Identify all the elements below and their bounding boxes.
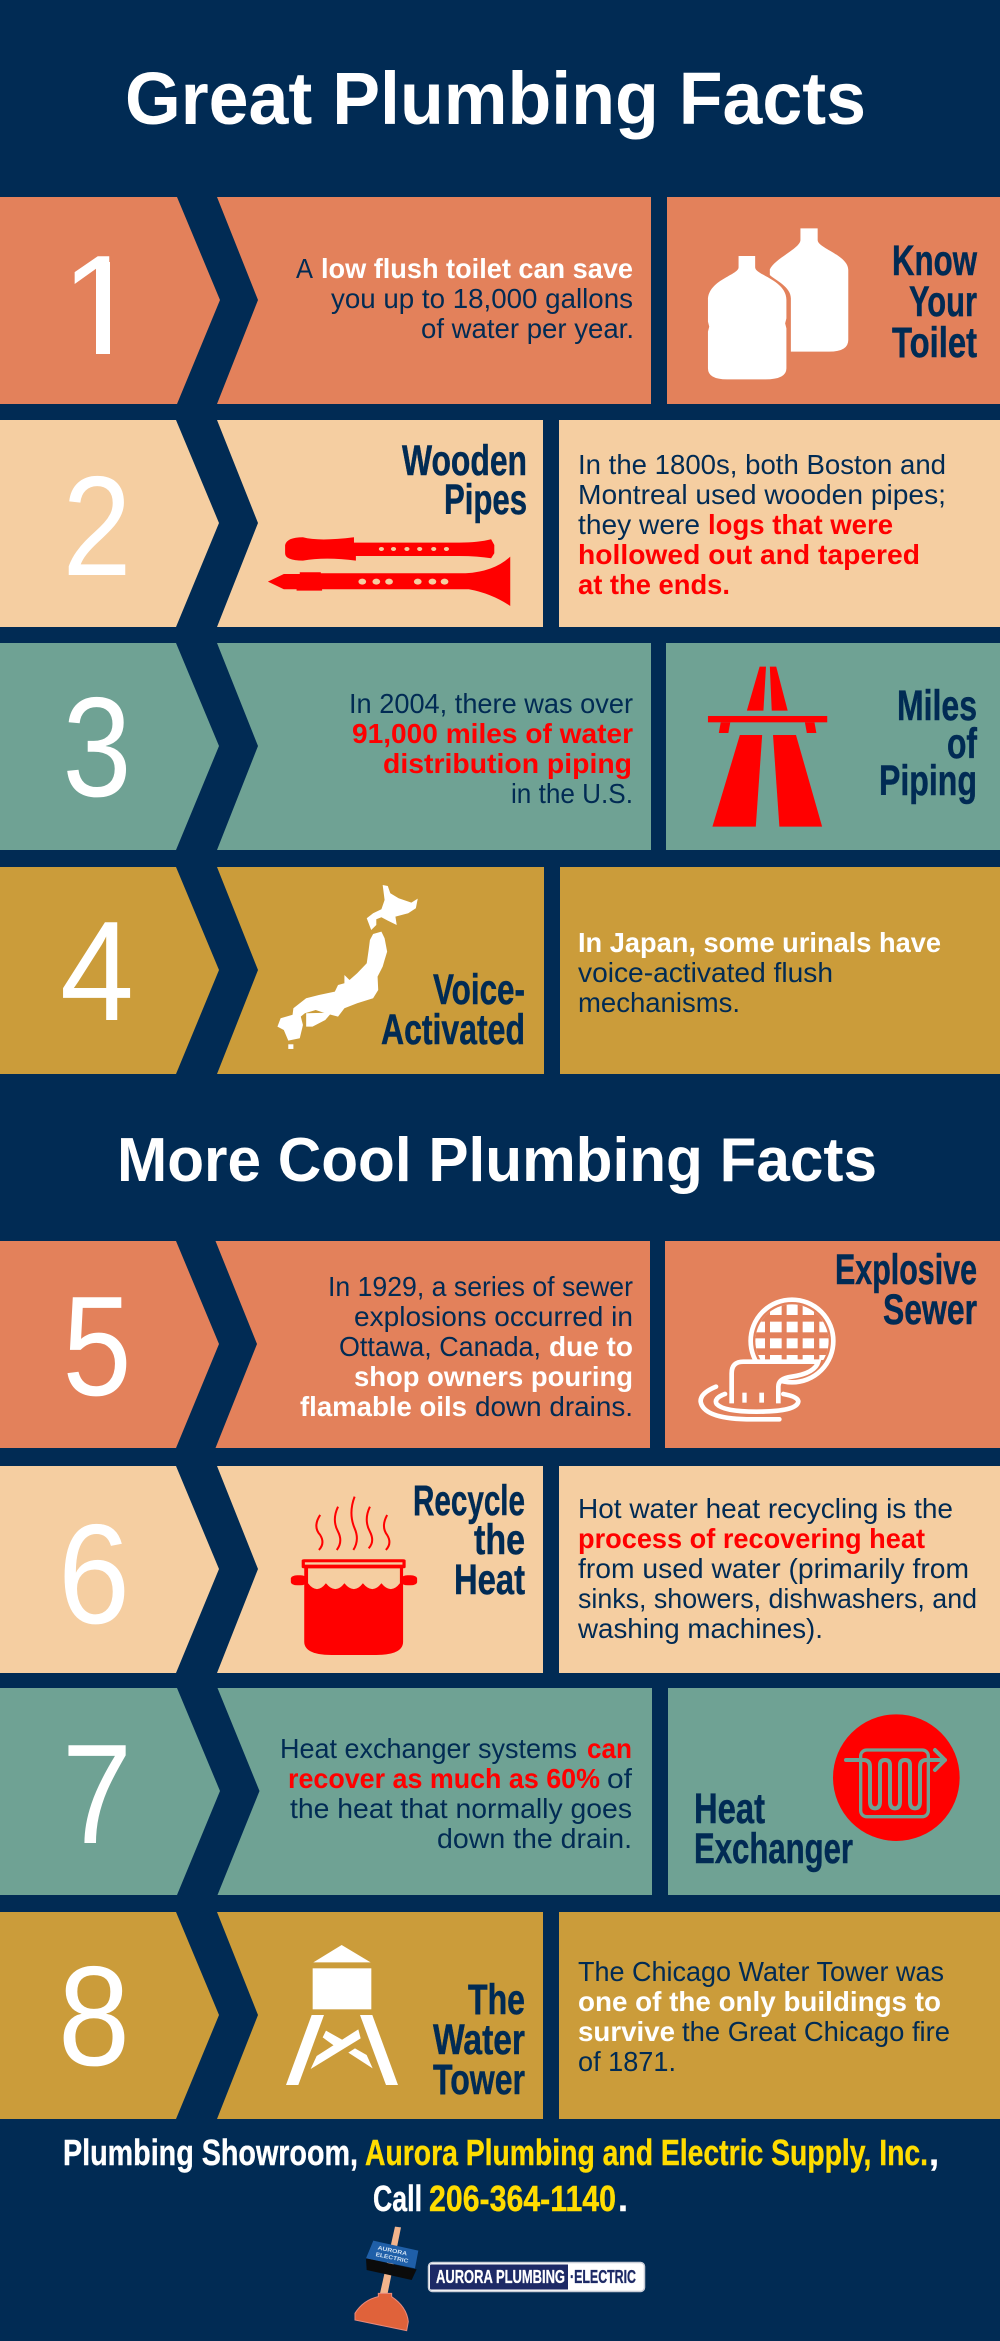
logo: aurora plumbing electric <box>428 2262 644 2292</box>
panel: know your toilet <box>667 197 1000 404</box>
fact 1 text block <box>217 197 651 404</box>
number chevron 5 <box>0 1241 219 1448</box>
fact 4 text block: mechanisms. <box>578 987 740 1018</box>
logo: aurora plumbing electric: ·ELECTRIC <box>570 2267 636 2287</box>
fact 7 text block <box>218 1688 652 1895</box>
fact 6 text block: washing machines). <box>577 1613 823 1644</box>
fact 2 text block: they were <box>578 509 700 540</box>
fact 5 text block <box>216 1241 650 1448</box>
fact 1 text block: of water per year. <box>421 313 634 344</box>
number chevron 6 <box>0 1466 219 1673</box>
icon: wooden pipes <box>268 537 510 606</box>
panel: fact 1 <box>0 197 1000 404</box>
number chevron 5: 5 <box>62 1267 132 1426</box>
number chevron 6: 6 <box>58 1495 130 1654</box>
heading: recycle the heat: Heat <box>454 1556 525 1604</box>
section heading: More Cool Plumbing Facts <box>117 1126 877 1195</box>
fact 2 text block: at the ends. <box>578 569 730 600</box>
number chevron 1: 1 <box>61 226 140 385</box>
panel: fact 3 <box>0 643 1000 850</box>
heading: the water tower: The <box>468 1976 525 2024</box>
fact 3 text block: 91,000 miles of water <box>352 718 633 749</box>
panel: voice-activated <box>217 867 544 1074</box>
heading: know your toilet <box>892 237 977 367</box>
logo: aurora plumbing electric: AURORA PLUMBING <box>436 2267 565 2287</box>
footer contact text: 206-364-1140 <box>429 2178 616 2219</box>
fact 4 text block: In Japan, some urinals have <box>578 927 941 958</box>
fact 3 text block: distribution piping <box>383 748 632 779</box>
icon: plunger logo <box>355 2227 418 2331</box>
fact 8 text block: the Great Chicago fire <box>682 2016 950 2047</box>
number chevron 3: 3 <box>62 668 132 827</box>
number chevron 8 <box>0 1912 219 2119</box>
panel: fact 5 <box>0 1241 1000 1448</box>
icon: plunger logo: ELECTRIC <box>375 2252 409 2265</box>
fact 3 text block: in the U.S. <box>511 778 633 809</box>
footer contact text: . <box>618 2178 628 2219</box>
fact 6 text block: process of recovering heat <box>578 1523 925 1554</box>
fact 5 text block: explosions occurred in <box>354 1301 633 1332</box>
fact 7 text block: can <box>587 1733 632 1764</box>
fact 8 text block: one of the only buildings to <box>578 1986 941 2017</box>
title: Great Plumbing Facts <box>125 57 866 140</box>
heading: voice-activated: Activated <box>381 1006 525 1054</box>
number chevron 4 <box>0 867 219 1074</box>
panel: fact 7 <box>0 1688 1000 1895</box>
fact 5 text block: Ottawa, Canada, <box>339 1331 541 1362</box>
fact 4 text block <box>560 867 1000 1074</box>
number chevron 2 <box>0 420 219 627</box>
icon: plunger logo: AURORA <box>377 2245 407 2258</box>
fact 2 text block: Montreal used wooden pipes; <box>578 479 946 510</box>
panel: fact 8 <box>0 1912 1000 2119</box>
fact 2 text block: logs that were <box>708 509 893 540</box>
number chevron 8: 8 <box>58 1937 130 2096</box>
fact 1 text block: you up to 18,000 gallons <box>331 283 633 314</box>
icon: steaming pot <box>291 1497 417 1655</box>
panel: heat exchanger <box>668 1688 1000 1895</box>
footer contact text <box>63 2132 939 2219</box>
fact 8 text block <box>559 1912 1000 2119</box>
fact 2 text block <box>559 420 1000 627</box>
icon: highway <box>708 667 827 827</box>
fact 2 text block: In the 1800s, both Boston and <box>578 449 946 480</box>
footer contact text: Call <box>373 2178 422 2219</box>
fact 5 text block: down drains. <box>475 1391 633 1422</box>
fact 5 text block: flamable oils <box>300 1391 467 1422</box>
fact 8 text block: survive <box>578 2016 675 2047</box>
fact 8 text block: The Chicago Water Tower was <box>578 1956 944 1987</box>
fact 7 text block: recover as much as 60% <box>288 1763 600 1794</box>
number chevron 1 <box>0 197 220 404</box>
icon: radiator in red circle <box>833 1714 960 1841</box>
heading: the water tower: Tower <box>433 2056 525 2104</box>
heading: recycle the heat <box>413 1477 525 1604</box>
footer contact text: , <box>929 2132 939 2173</box>
fact 5 text block: shop owners pouring <box>354 1361 633 1392</box>
fact 1 text block: A <box>296 253 313 284</box>
fact 3 text block <box>217 643 651 850</box>
icon: sewer <box>701 1297 833 1419</box>
heading: wooden pipes: Wooden <box>402 437 527 485</box>
icon: water bottles <box>708 228 848 379</box>
fact 3 text block: In 2004, there was over <box>349 688 633 719</box>
heading: heat exchanger <box>694 1785 853 1873</box>
fact 8 text block: of 1871. <box>578 2046 676 2077</box>
heading: heat exchanger: Exchanger <box>694 1825 853 1873</box>
panel: the water tower <box>217 1912 543 2119</box>
panel: fact 2 <box>0 420 1000 627</box>
fact 6 text block: from used water (primarily from <box>578 1553 969 1584</box>
number chevron 7: 7 <box>62 1715 132 1874</box>
fact 6 text block <box>559 1466 1000 1673</box>
fact 7 text block: the heat that normally goes <box>290 1793 632 1824</box>
heading: wooden pipes <box>402 437 527 524</box>
heading: explosive sewer <box>835 1246 977 1334</box>
fact 5 text block: In 1929, a series of sewer <box>328 1271 633 1302</box>
panel: fact 6 <box>0 1466 1000 1673</box>
number chevron 4: 4 <box>60 892 134 1051</box>
fact 5 text block: due to <box>549 1331 633 1362</box>
number chevron 2: 2 <box>62 447 132 606</box>
panel: wooden pipes <box>217 420 543 627</box>
icon: water tower <box>286 1945 398 2085</box>
footer contact text: Plumbing Showroom, <box>63 2132 358 2173</box>
fact 7 text block: of <box>607 1763 632 1794</box>
fact 1 text block: low flush toilet can save <box>321 253 633 284</box>
heading: recycle the heat: the <box>474 1516 525 1564</box>
heading: voice-activated <box>381 966 525 1054</box>
fact 6 text block: sinks, showers, dishwashers, and <box>578 1583 977 1614</box>
heading: heat exchanger: Heat <box>694 1785 765 1833</box>
heading: the water tower <box>433 1976 525 2104</box>
panel: explosive sewer <box>665 1241 1000 1448</box>
heading: miles of piping <box>879 682 977 805</box>
panel: fact 4 <box>0 867 1000 1074</box>
icon: map of japan <box>277 885 418 1049</box>
panel: recycle the heat <box>217 1466 543 1673</box>
heading: recycle the heat: Recycle <box>413 1477 525 1525</box>
fact 6 text block: Hot water heat recycling is the <box>578 1493 953 1524</box>
fact 7 text block: down the drain. <box>437 1823 632 1854</box>
heading: voice-activated: Voice- <box>433 966 525 1014</box>
fact 7 text block: Heat exchanger systems <box>280 1733 577 1764</box>
heading: the water tower: Water <box>433 2016 525 2064</box>
heading: wooden pipes: Pipes <box>444 476 527 524</box>
fact 4 text block: voice-activated flush <box>578 957 833 988</box>
number chevron 7 <box>0 1688 220 1895</box>
heading: miles of piping: of <box>947 720 977 768</box>
panel: miles of piping <box>666 643 1000 850</box>
number chevron 3 <box>0 643 219 850</box>
fact 2 text block: hollowed out and tapered <box>578 539 920 570</box>
